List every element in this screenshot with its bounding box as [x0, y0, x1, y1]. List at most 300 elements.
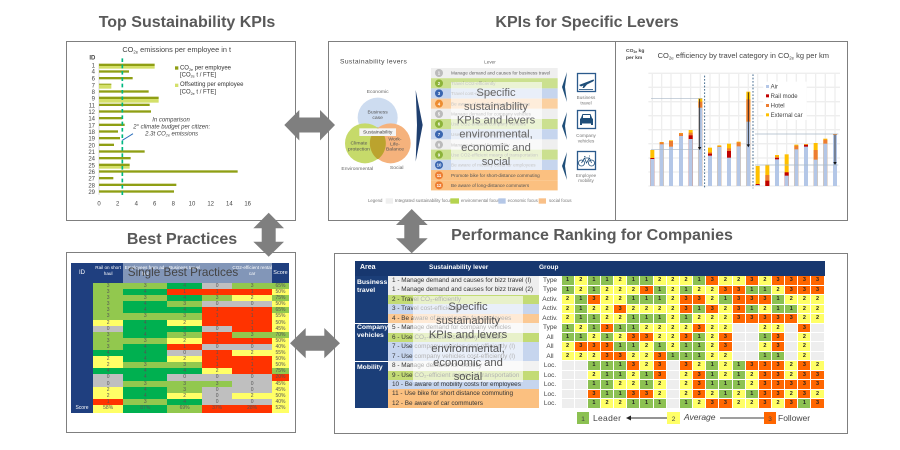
group column [539, 276, 561, 409]
heat map: ranking of companies: 2 [803, 315, 806, 321]
group column: Loc. [544, 362, 556, 369]
heat map: ranking of companies: 3 [803, 277, 806, 283]
table: single best practices scores: Rail on short haul [95, 265, 121, 276]
heat map: ranking of companies: 3 [698, 296, 701, 302]
bar chart: CO2 emissions per employee: 6 [153, 202, 157, 208]
heat map: ranking of companies: 1 [684, 315, 688, 321]
heat map: ranking of companies: 1 [645, 372, 648, 378]
heat map: ranking of companies: 1 [750, 306, 753, 312]
heat map: ranking of companies: 3 [684, 362, 688, 368]
heat map: ranking of companies: 1 [737, 372, 740, 378]
bar chart: CO2 emissions per employee: 2° climate budget per citizen: [132, 125, 210, 131]
table: single best practices scores: 0 [107, 380, 110, 386]
table: single best practices scores: 3 [251, 332, 254, 338]
heat map: ranking of companies: 3 [724, 334, 727, 340]
table: single best practices scores: 20% [275, 374, 285, 380]
heat map: ranking of companies: 2 [645, 325, 648, 331]
group column: Loc. [544, 372, 556, 379]
heat map: ranking of companies: 3 [750, 296, 753, 302]
panel: top KPIs frame [66, 41, 296, 221]
table: sustainability levers and areas: 6 - Use CO₂-efficient company vehicles [392, 334, 503, 341]
table: single best practices scores: 0 [216, 387, 219, 393]
table: single best practices scores: 1 [251, 362, 254, 368]
heat map: ranking of companies: 1 [763, 287, 766, 293]
table: single best practices scores: Employees from ad-hoc [125, 265, 166, 276]
overlay text: specific sustainability KPIs: sustainability [464, 101, 528, 113]
heat map: ranking of companies: 1 [632, 400, 635, 406]
panel: efficiency frame [615, 41, 848, 221]
area column: Business [357, 279, 387, 286]
heat map: ranking of companies: 2 [763, 343, 766, 349]
heat map: ranking of companies: 2 [816, 315, 819, 321]
area column: Mobility [357, 364, 383, 371]
table: sustainability levers and areas: 1 - Manage demand and causes for bizz travel (2) [392, 286, 533, 293]
heat map: ranking of companies: 2 [711, 343, 714, 349]
bar chart: CO2 emissions per employee: 9 [92, 97, 96, 103]
group column: Type [543, 277, 557, 284]
legend: leader, average, follower: Follower [778, 413, 810, 423]
heat map: ranking of companies: 3 [763, 315, 766, 321]
heat map: ranking of companies: 3 [816, 277, 819, 283]
heat map: ranking of companies: 3 [790, 277, 793, 283]
bar chart: CO2 emissions per employee: 4 [92, 70, 96, 76]
heat map: ranking of companies: 2 [698, 287, 701, 293]
table: single best practices scores: 0 [216, 374, 219, 380]
heat map: ranking of companies: 1 [645, 381, 648, 387]
overlay text: specific sustainability KPIs [451, 82, 542, 170]
list: twelve sustainability levers: Be aware of mobility costs for employees [451, 163, 536, 168]
table: single best practices scores: 3 [107, 289, 110, 295]
heat map: ranking of companies: 3 [777, 372, 780, 378]
table: single best practices scores: 3 [107, 295, 110, 301]
stacked bar chart: CO2 efficiency by travel category: 2e [669, 55, 674, 60]
heat map: ranking of companies: 1 [684, 287, 688, 293]
list: twelve sustainability levers: Be aware of long-distance commuters [451, 183, 530, 188]
heat map: ranking of companies: 1 [698, 353, 701, 359]
heat map: ranking of companies: 2 [803, 353, 806, 359]
heat map: ranking of companies: 3 [632, 362, 635, 368]
table: single best practices scores: 52% [275, 405, 285, 411]
table: single best practices scores: 1 [251, 356, 254, 362]
list: twelve sustainability levers: Be aware of travel costs per employee [451, 101, 531, 106]
bar chart: CO2 emissions per employee: [CO [180, 72, 191, 78]
heat map: ranking of companies: 3 [606, 343, 609, 349]
table: single best practices scores: 1 [251, 307, 254, 313]
table: single best practices scores: 1 [216, 362, 219, 368]
heat map: ranking of companies: 2 [711, 391, 714, 397]
icons: business travel, company vehicles, employee mobility: travel [580, 100, 592, 106]
table: single best practices scores: 4 [144, 307, 147, 313]
heat map: ranking of companies: 3 [737, 296, 740, 302]
legend: leader, average, follower [577, 412, 810, 424]
heat map: ranking of companies: 3 [777, 381, 780, 387]
table: single best practices scores: 55% [275, 313, 285, 319]
group column: Type [543, 286, 557, 293]
heat map: ranking of companies: 2 [566, 296, 569, 302]
heat map: ranking of companies: 3 [763, 391, 766, 397]
table: sustainability levers and areas: 4 - Be aware of travel costs for employees [392, 315, 511, 322]
table: single best practices scores: 0 [107, 326, 110, 332]
area column [355, 276, 388, 408]
overlay text: specific sustainability KPIs in ranking: KPIs and levers [429, 329, 507, 341]
heat map: ranking of companies: 2 [711, 353, 714, 359]
table: single best practices scores: 4 [144, 289, 147, 295]
table: single best practices scores: 0 [251, 399, 254, 405]
bar chart: CO2 emissions per employee: 17 [88, 123, 96, 129]
bar chart: CO2 emissions per employee: emissions per employee in t [138, 45, 231, 54]
group column: Type [543, 324, 557, 331]
diagram: sustainability levers venn: Economic [367, 89, 389, 95]
lever rows [388, 276, 539, 408]
bar chart: CO2 emissions per employee: 2e [191, 92, 195, 96]
heat map: ranking of companies: 1 [566, 287, 569, 293]
diagram: sustainability levers venn: Social [390, 165, 403, 171]
heat map: ranking of companies: 2 [790, 372, 793, 378]
heat map: ranking of companies: 3 [619, 353, 622, 359]
heat map: ranking of companies: 1 [763, 334, 766, 340]
diagram: sustainability levers venn: case [372, 115, 383, 121]
table: single best practices scores: 1 [251, 326, 254, 332]
heat map: ranking of companies: 3 [645, 391, 648, 397]
stacked bar chart: CO2 efficiency by travel category: Air [771, 85, 778, 91]
table: single best practices scores: 1 [216, 332, 219, 338]
heat map: ranking of companies: 2 [816, 296, 819, 302]
area column: vehicles [357, 332, 384, 339]
stacked bar chart: CO2 efficiency by travel category [626, 48, 840, 188]
table: single best practices scores: 0 [216, 399, 219, 405]
table: single best practices scores: 55% [275, 350, 285, 356]
bar chart: CO2 emissions per employee: 2e [165, 134, 170, 138]
table: single best practices scores: 4 [144, 350, 147, 356]
diagram: sustainability levers venn: Work- [388, 136, 402, 142]
heat map: ranking of companies: 2 [579, 325, 582, 331]
title: performance ranking: Performance Ranking for Companies [451, 227, 733, 244]
table: single best practices scores: 3 [107, 307, 110, 313]
heat map: ranking of companies: 1 [619, 372, 622, 378]
heat map: ranking of companies: 2 [790, 296, 793, 302]
table: single best practices scores: 50% [275, 362, 285, 368]
table: single best practices scores: 50% [275, 338, 285, 344]
diagram: sustainability levers venn: Sustainability levers [340, 58, 407, 65]
heat map: ranking of companies: 2 [645, 306, 648, 312]
bar chart: CO2 emissions per employee [88, 45, 252, 208]
heat map: ranking of companies: 3 [724, 343, 727, 349]
table: single best practices scores: 2 [251, 295, 254, 301]
bar chart: CO2 emissions per employee: 12 [207, 202, 215, 208]
heat map: ranking of companies: 1 [592, 315, 595, 321]
heat map: ranking of companies: 1 [711, 372, 714, 378]
table: single best practices scores: 4 [183, 368, 186, 374]
group column: Activ. [542, 305, 558, 312]
title: best practices: Best Practices [127, 231, 237, 248]
heat map: ranking of companies: 2 [698, 315, 701, 321]
heat map: ranking of companies: 3 [658, 353, 661, 359]
heat map: ranking of companies: 1 [737, 381, 740, 387]
heat map: ranking of companies: 1 [606, 277, 609, 283]
heat map: ranking of companies: 3 [750, 362, 753, 368]
table: single best practices scores: 58% [103, 405, 113, 411]
heat map: ranking of companies: 2 [632, 306, 635, 312]
bar chart: CO2 emissions per employee: ID [89, 56, 96, 62]
heat map: ranking of companies: 2 [724, 325, 727, 331]
bar chart: CO2 emissions per employee: 12 [88, 110, 96, 116]
table: single best practices scores: 70% [275, 332, 285, 338]
heat map: ranking of companies: 1 [619, 362, 622, 368]
bar chart: CO2 emissions per employee: 2e [191, 75, 195, 79]
heat map: ranking of companies: 3 [790, 315, 793, 321]
table: single best practices scores: 3 [107, 344, 110, 350]
heat map: ranking of companies: 3 [592, 391, 595, 397]
heat map: ranking of companies: 2 [671, 277, 674, 283]
legend: lever focus categories [368, 198, 572, 204]
heat map: ranking of companies: 1 [579, 315, 582, 321]
bar chart: CO2 emissions per employee: 2 [116, 202, 120, 208]
bar chart: CO2 emissions per employee: 10 [189, 202, 196, 208]
heat map: ranking of companies: 3 [737, 287, 740, 293]
legend: leader, average, follower: 2 [672, 416, 676, 423]
heat map: ranking of companies: 2 [777, 287, 780, 293]
heat map: ranking of companies: 1 [645, 400, 648, 406]
heat map: ranking of companies: 1 [698, 334, 701, 340]
heat map: ranking of companies: 2 [619, 315, 622, 321]
heat map: ranking of companies: 1 [658, 296, 661, 302]
group column: All [546, 343, 554, 350]
stacked bar chart: CO2 efficiency by travel category: kg per km [794, 51, 829, 60]
table header bar [355, 261, 825, 276]
heat map: ranking of companies: 2 [619, 334, 622, 340]
table: single best practices scores: 1 [216, 338, 219, 344]
group column: Activ. [542, 315, 558, 322]
heat map: ranking of companies: 2 [671, 343, 674, 349]
table: single best practices scores: 37% [212, 405, 222, 411]
heat map: ranking of companies: 3 [790, 287, 793, 293]
panel: best practices frame [66, 252, 296, 433]
stacked bar chart: CO2 efficiency by travel category: 2e [633, 50, 637, 54]
table: single best practices scores: 50% [275, 301, 285, 307]
heat map: ranking of companies: 3 [816, 381, 819, 387]
table: single best practices scores: 0 [216, 283, 219, 289]
table: single best practices scores: 45% [275, 387, 285, 393]
heat map: ranking of companies: 2 [724, 353, 727, 359]
heat map: ranking of companies: 1 [566, 277, 569, 283]
heat map: ranking of companies: 2 [632, 353, 635, 359]
table: single best practices scores: 3 [144, 283, 147, 289]
heat map: ranking of companies: 3 [803, 287, 806, 293]
heat map: ranking of companies: 2 [645, 353, 648, 359]
icons: business travel, company vehicles, employee mobility: Employee [576, 173, 597, 178]
table: single best practices scores: 87% [140, 405, 150, 411]
heat map: ranking of companies: 1 [684, 353, 688, 359]
table: single best practices scores: 3 [107, 332, 110, 338]
heat map: ranking of companies: 2 [671, 306, 674, 312]
heat map: ranking of companies: 2 [671, 325, 674, 331]
bar chart: CO2 emissions per employee: 25 [88, 163, 96, 169]
list: twelve sustainability levers: 4 [438, 101, 441, 106]
heat map: ranking of companies: 2 [592, 306, 595, 312]
heat map: ranking of companies: 1 [737, 362, 740, 368]
heat map: ranking of companies: 3 [803, 391, 806, 397]
table: single best practices scores: 4 [144, 374, 147, 380]
icons: business travel, company vehicles, employee mobility: Business [577, 95, 596, 100]
heat map: ranking of companies: 3 [763, 400, 766, 406]
heat map: ranking of companies: 2 [777, 325, 780, 331]
heat map: ranking of companies: 1 [698, 277, 701, 283]
heat map: ranking of companies: 1 [592, 325, 595, 331]
heat map: ranking of companies: 3 [777, 362, 780, 368]
heat map: ranking of companies: 2 [763, 277, 766, 283]
heat map: ranking of companies: 2 [763, 306, 766, 312]
table: single best practices scores: 75% [275, 368, 285, 374]
stacked bar chart: CO2 efficiency by travel category: CO [626, 48, 633, 54]
group column: All [546, 353, 554, 360]
heat map: ranking of companies: 1 [790, 306, 793, 312]
overlay text: specific sustainability KPIs: economic and [461, 142, 531, 154]
table: single best practices scores: 65% [275, 283, 285, 289]
heat map: ranking of companies: 1 [777, 296, 780, 302]
list: twelve sustainability levers: Manage demand for mobility [451, 142, 510, 147]
heat map: ranking of companies: 1 [606, 381, 609, 387]
heat map: ranking of companies: 2 [632, 372, 635, 378]
table: single best practices scores: 3 [216, 380, 219, 386]
table: single best practices scores: 1 [216, 313, 219, 319]
table: single best practices scores: 0 [216, 344, 219, 350]
heat map: ranking of companies [562, 276, 824, 408]
heat map: ranking of companies: 3 [606, 325, 609, 331]
table: single best practices scores: 3 [183, 362, 186, 368]
heat map: ranking of companies: 2 [579, 277, 582, 283]
title: top sustainability KPIs: Top Sustainability KPIs [99, 14, 275, 31]
heat map: ranking of companies: 2 [816, 306, 819, 312]
list: twelve sustainability levers: Manage demand and causes for business travel [451, 71, 550, 76]
bar chart: CO2 emissions per employee: 28 [88, 183, 96, 189]
heat map: ranking of companies: 3 [711, 306, 714, 312]
heat map: ranking of companies: 2 [790, 362, 793, 368]
bar chart: CO2 emissions per employee: In comparison [152, 117, 190, 123]
list: twelve sustainability levers: Promote bike for short-distance commuting [451, 173, 540, 178]
table: single best practices scores: 3 [183, 380, 186, 386]
table: single best practices scores: 65% [275, 307, 285, 313]
table: sustainability levers and areas [355, 261, 825, 408]
list: twelve sustainability levers: 8 [438, 142, 441, 147]
heat map: ranking of companies: 2 [750, 400, 753, 406]
heat map: ranking of companies: 3 [790, 381, 793, 387]
table: single best practices scores: 28% [247, 405, 257, 411]
heat map: ranking of companies: 2 [816, 391, 819, 397]
group column: Activ. [542, 296, 558, 303]
table: single best practices scores: 4 [144, 356, 147, 362]
heat map: ranking of companies: 2 [619, 277, 622, 283]
heat map: ranking of companies: 1 [606, 372, 609, 378]
table: single best practices scores: 1 [216, 356, 219, 362]
heat map: ranking of companies: 3 [619, 306, 622, 312]
bar chart: CO2 emissions per employee: 29 [88, 190, 96, 196]
table: single best practices scores: 2 [107, 393, 110, 399]
heat map: ranking of companies: 1 [566, 325, 569, 331]
stacked bar chart: CO2 efficiency by travel category: kg [637, 48, 644, 54]
heat map: ranking of companies: 1 [777, 306, 780, 312]
bar chart: CO2 emissions per employee: 27 [88, 177, 96, 183]
table: single best practices scores: 1 [216, 289, 219, 295]
heat map: ranking of companies: 2 [724, 315, 727, 321]
table: single best practices scores: 1 [251, 313, 254, 319]
heat map: ranking of companies: 2 [790, 391, 793, 397]
table: single best practices scores: 3 [251, 283, 254, 289]
heat map: ranking of companies: 2 [724, 277, 727, 283]
heat map: ranking of companies: 2 [724, 306, 727, 312]
list: twelve sustainability levers: Use CO2-efficient means of transportation [451, 152, 538, 157]
bar chart: CO2 emissions per employee: per employee [193, 66, 232, 72]
icons: business travel, company vehicles, employee mobility: vehicles [578, 138, 595, 144]
table: single best practices scores: 1 [183, 289, 186, 295]
heat map: ranking of companies: 3 [763, 296, 766, 302]
heat map: ranking of companies: 2 [750, 381, 753, 387]
bar chart: CO2 emissions per employee: 4 [135, 202, 139, 208]
heat map: ranking of companies: 2 [658, 277, 661, 283]
list: twelve sustainability levers: 7 [438, 132, 441, 137]
table: single best practices scores: 1 [216, 350, 219, 356]
arrow: levers to ranking [396, 209, 428, 253]
heat map: ranking of companies: 2 [711, 334, 714, 340]
heat map: ranking of companies: 2 [645, 343, 648, 349]
arrow: top KPIs to levers [284, 110, 335, 140]
table: single best practices scores: 0 [216, 326, 219, 332]
table: single best practices scores: 4 [144, 393, 147, 399]
heat map: ranking of companies: 2 [579, 353, 582, 359]
heat map: ranking of companies: 2 [684, 381, 688, 387]
list: twelve sustainability levers: Manage demand for company vehicles [451, 112, 532, 117]
table: single best practices scores: 0 [251, 387, 254, 393]
overlay text: specific sustainability KPIs: environmental, [459, 128, 533, 140]
heat map: ranking of companies: 1 [632, 296, 635, 302]
bar chart: CO2 emissions per employee: CO [122, 45, 133, 54]
bar chart: CO2 emissions per employee: 2e [189, 68, 193, 72]
heat map: ranking of companies: 1 [671, 353, 674, 359]
overlay text: specific sustainability KPIs in ranking [413, 296, 523, 382]
heat map: ranking of companies: 2 [658, 325, 661, 331]
stacked bar chart: CO2 efficiency by travel category: 2e [789, 55, 795, 60]
table: sustainability levers and areas: 10 - Be aware of mobility costs for employees [392, 381, 521, 388]
bar chart: CO2 emissions per employee: 0 [97, 202, 101, 208]
bar chart: CO2 emissions per employee: 21 [88, 150, 96, 156]
heat map: ranking of companies: 3 [777, 277, 780, 283]
table header bar: Sustainability lever [429, 264, 488, 271]
heat map: ranking of companies: 3 [724, 400, 727, 406]
bar chart: CO2 emissions per employee: emissions [170, 131, 198, 137]
heat map: ranking of companies: 1 [619, 343, 622, 349]
heat map: ranking of companies: 3 [632, 334, 635, 340]
group column: Loc. [544, 390, 556, 398]
table: single best practices scores: CO2-efficient rental car [232, 265, 272, 276]
table: single best practices scores: 2 [107, 387, 110, 393]
overlay text: specific sustainability KPIs in ranking: environmental, [431, 343, 505, 355]
table: single best practices scores: 3 [216, 295, 219, 301]
heat map: ranking of companies: 3 [724, 287, 727, 293]
table: single best practices scores: 4 [183, 399, 186, 405]
table: single best practices scores: 4 [144, 301, 147, 307]
bar chart: CO2 emissions per employee: 20 [88, 143, 96, 149]
area column: travel [357, 287, 375, 294]
heat map: ranking of companies: 3 [750, 277, 753, 283]
heat map: ranking of companies: 3 [763, 362, 766, 368]
heat map: ranking of companies: 3 [698, 381, 701, 387]
heat map: ranking of companies: 1 [777, 353, 780, 359]
heat map: ranking of companies: 2 [711, 296, 714, 302]
table: single best practices scores: ID [79, 270, 85, 276]
bar chart: CO2 emissions per employee: 24 [88, 157, 96, 163]
heat map: ranking of companies: 2 [592, 372, 595, 378]
heat map: ranking of companies: 3 [777, 343, 780, 349]
heat map: ranking of companies: 2 [737, 277, 740, 283]
